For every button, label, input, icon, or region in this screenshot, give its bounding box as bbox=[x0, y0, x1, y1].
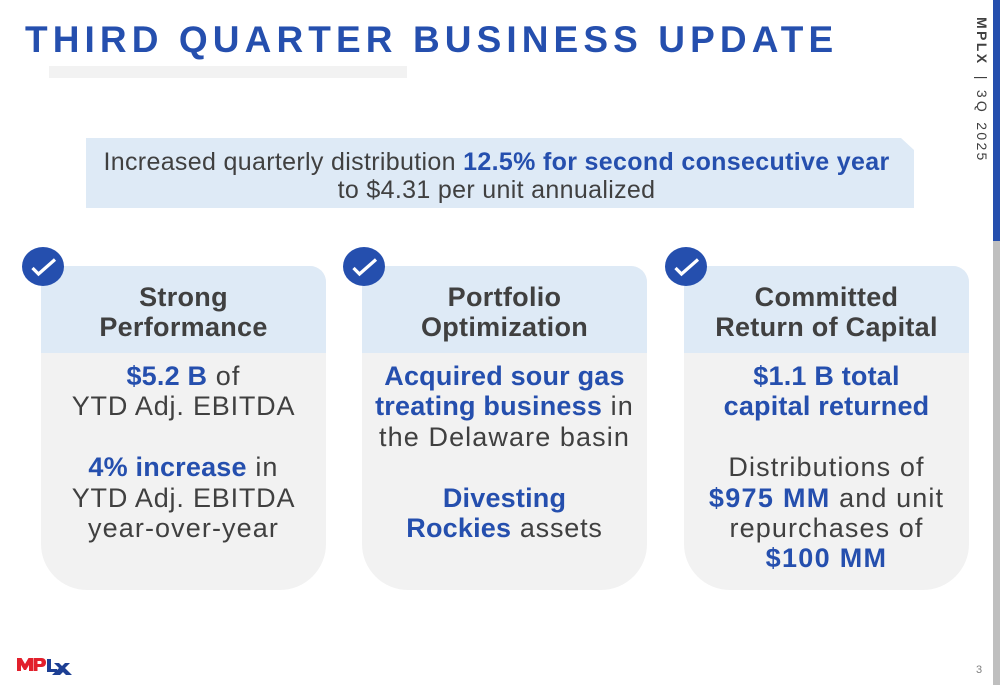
panel: portfolio optimization bbox=[362, 266, 647, 590]
icon: check badge 1 bbox=[22, 247, 64, 286]
panel text bbox=[72, 361, 295, 543]
panel text: Rockies assets bbox=[406, 513, 603, 543]
panel text: Distributions of bbox=[728, 452, 925, 482]
panel text: repurchases of bbox=[730, 513, 924, 543]
panel heading: Portfolio bbox=[448, 282, 561, 312]
page number: 3 bbox=[976, 664, 982, 676]
title: THIRD QUARTER BUSINESS UPDATE bbox=[25, 19, 838, 60]
panel text: $1.1 B total bbox=[753, 361, 900, 391]
icon: check badge 2 bbox=[343, 247, 385, 286]
panel text bbox=[375, 361, 634, 543]
logo: MPLX bbox=[17, 658, 72, 675]
callout banner bbox=[86, 138, 914, 208]
panel text: year-over-year bbox=[88, 513, 279, 543]
callout banner: Increased quarterly distribution 12.5% for second consecutive year bbox=[103, 148, 890, 176]
panel text: 4% increase in bbox=[88, 452, 279, 482]
panel: committed return of capital bbox=[684, 266, 969, 590]
panel heading bbox=[362, 266, 647, 353]
panel text: $100 MM bbox=[766, 543, 887, 573]
panel text: Divesting bbox=[443, 483, 566, 513]
panel text: $5.2 B of bbox=[126, 361, 241, 391]
panel text: YTD Adj. EBITDA bbox=[72, 391, 295, 421]
panel heading bbox=[41, 266, 326, 353]
callout banner: to $4.31 per unit annualized bbox=[338, 176, 655, 204]
panel heading: Optimization bbox=[421, 312, 588, 342]
panel text: $975 MM and unit bbox=[709, 483, 944, 513]
panel heading: Strong bbox=[139, 282, 228, 312]
panel text: Acquired sour gas bbox=[384, 361, 625, 391]
panel text: YTD Adj. EBITDA bbox=[72, 483, 295, 513]
panel: strong performance bbox=[41, 266, 326, 590]
panel heading bbox=[684, 266, 969, 353]
panel text: capital returned bbox=[724, 391, 929, 421]
icon: check badge 3 bbox=[665, 247, 707, 286]
side bar bbox=[993, 0, 1000, 685]
panel heading: Committed bbox=[755, 282, 898, 312]
panel heading: Performance bbox=[99, 312, 268, 342]
panel text bbox=[709, 361, 944, 573]
panel text: the Delaware basin bbox=[379, 422, 630, 452]
title underline bar bbox=[49, 66, 407, 78]
side label: MPLX | 3Q 2025 bbox=[974, 17, 990, 163]
side bar accent bbox=[993, 0, 1000, 241]
panel text: treating business in bbox=[375, 391, 634, 421]
panel heading: Return of Capital bbox=[715, 312, 938, 342]
